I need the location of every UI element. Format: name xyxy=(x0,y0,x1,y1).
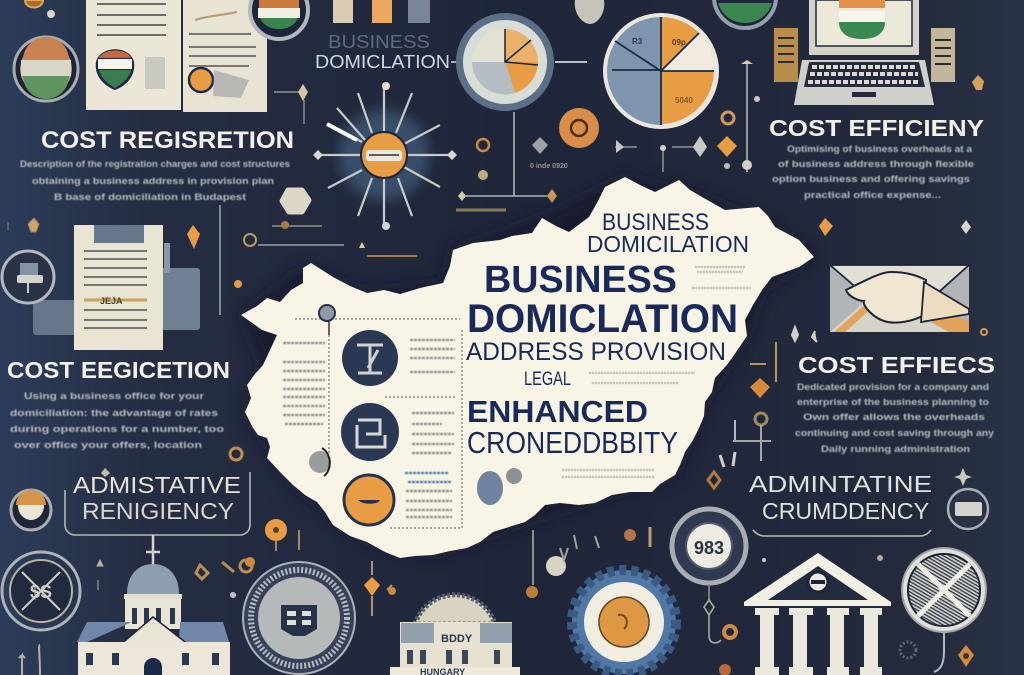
icon: minus badge xyxy=(948,489,988,529)
icon: 983 circular badge xyxy=(672,509,746,643)
map heading small: DOMICILATION xyxy=(587,231,749,257)
heading: administrative right xyxy=(749,471,932,536)
heading: cost effiecs: COST EFFIECS xyxy=(798,352,995,378)
map heading large: BUSINESS xyxy=(484,259,677,301)
heading: cost efficiency: COST EFFICIENY xyxy=(769,115,984,141)
panel: document and printer left: JEJA xyxy=(100,296,123,306)
heading: cost registration: COST REGISRETION xyxy=(41,127,294,154)
map heading large: DOMICLATION xyxy=(467,297,738,341)
text block: cost effects description: Daily running administration xyxy=(821,444,970,455)
text block: cost efficiency description: option business and offering savings xyxy=(772,174,970,185)
text block: cost effects description: enterprise of the business planning to xyxy=(797,397,989,408)
text block: registration description: B base of domiciliation in Budapest xyxy=(54,192,247,203)
map heading: enhanced credibility: CRONEDDBBITY xyxy=(467,425,678,460)
icon: pie chart: R3 xyxy=(632,37,643,46)
icon: classical temple xyxy=(744,553,891,675)
map subheading: address provision: ADDRESS PROVISION xyxy=(466,338,726,366)
panel: central map of Hungary xyxy=(241,177,814,558)
text block: efficiency description left: over office your offers, location xyxy=(14,440,202,451)
icon: flag badge small left xyxy=(11,490,51,530)
icon: crossed seal left xyxy=(2,552,80,630)
heading: administrative right: ADMINTATINE xyxy=(749,471,932,497)
icon: building Hungary: BDDY xyxy=(441,633,473,645)
icon: domed government building xyxy=(19,535,230,675)
map shadow xyxy=(241,177,814,555)
text block: registration description: obtaining a business address in provision plan xyxy=(32,176,274,187)
text block: registration description: Description of the registration charges and cost structures xyxy=(20,159,290,170)
callout: administrative residency left: ADMISTATIVE xyxy=(73,472,241,498)
icon: sunburst flag xyxy=(313,82,457,230)
text block: efficiency description left xyxy=(7,357,230,451)
heading: business domiciliation faded xyxy=(315,32,450,72)
icon: orange coin xyxy=(559,108,599,148)
heading: cost efficiency left: COST EEGICETION xyxy=(7,357,230,383)
panel: document and printer left xyxy=(33,225,200,350)
callout: administrative residency left: RENIGIENCY xyxy=(82,498,234,524)
timeline connectors xyxy=(530,60,760,172)
icon: pie chart: 5040 xyxy=(675,96,693,105)
text block: registration description xyxy=(20,159,290,203)
text block: cost efficiency description: Optimising of business overheads at a xyxy=(787,144,973,155)
icon: gold marks lower middle xyxy=(97,448,396,616)
text block: efficiency description left: during operations for a number, too xyxy=(10,424,224,435)
map heading small: BUSINESS xyxy=(602,209,709,236)
text block: efficiency description left: domiciliation: the advantage of rates xyxy=(10,408,218,419)
icon: flag badge left xyxy=(14,37,78,101)
top grey shape xyxy=(575,0,604,24)
text block: cost effects description xyxy=(795,382,995,455)
icon: 983 circular badge: 983 xyxy=(694,538,724,558)
icon: flag badge top xyxy=(250,0,308,39)
icon: handshake envelope xyxy=(792,218,987,342)
small connectors and marks xyxy=(8,0,506,315)
map subheading: legal: LEGAL xyxy=(524,369,571,390)
text block: cost efficiency description xyxy=(772,144,974,201)
icon: building Hungary xyxy=(390,595,520,675)
text block: cost effects description: continuing and cost saving through any xyxy=(795,428,995,439)
map heading: enhanced credibility: ENHANCED xyxy=(467,394,648,429)
document page left xyxy=(86,0,181,110)
map rows: icons and fine print xyxy=(283,267,752,530)
icon: building seal xyxy=(342,330,398,386)
icon: small marks above gear xyxy=(526,527,650,598)
panel: top-left registration documents xyxy=(14,0,308,112)
map heading: enhanced credibility xyxy=(467,394,678,460)
map heading large xyxy=(467,259,738,341)
icon: pie chart: 09p xyxy=(672,38,686,47)
document page right xyxy=(183,0,267,112)
callout: administrative residency left xyxy=(65,472,250,535)
text block: efficiency description left: Using a business office for your xyxy=(24,391,204,402)
top small cards xyxy=(333,0,430,23)
text block: cost efficiency description: practical office expense... xyxy=(804,190,941,201)
fine print columns xyxy=(283,267,752,517)
icon: gear with orange core xyxy=(572,570,676,674)
map silhouette xyxy=(241,177,814,558)
icon: round seal xyxy=(243,562,355,674)
icon: stamp badge xyxy=(2,251,54,303)
timeline connectors: 0 inde 0920 xyxy=(530,163,568,170)
text block: cost effects description: Dedicated provision for a company and xyxy=(797,382,989,393)
map heading small xyxy=(587,209,749,257)
icon: beige blob xyxy=(282,190,309,212)
icon: pie chart xyxy=(603,13,719,129)
icon: dial with pie xyxy=(451,13,587,111)
text block: cost efficiency description: of business address through flexible xyxy=(778,159,974,170)
icon: laptop xyxy=(774,0,984,105)
connector cluster right of map xyxy=(708,342,776,488)
icon: orange seal xyxy=(344,475,394,525)
icon: flag badge top centre xyxy=(714,0,776,28)
icon: hatched seal xyxy=(719,468,986,675)
connector: sun to dial xyxy=(458,112,557,203)
heading: business domiciliation faded: BUSINESS xyxy=(328,32,430,52)
icon: scroll seal xyxy=(341,403,399,461)
heading: business domiciliation faded: DOMICLATION xyxy=(315,52,450,72)
heading: administrative right: CRUMDDENCY xyxy=(762,498,929,524)
icon: crossed seal left: $S xyxy=(30,582,52,602)
text block: cost effects description: Own offer allows the overheads xyxy=(803,412,985,423)
